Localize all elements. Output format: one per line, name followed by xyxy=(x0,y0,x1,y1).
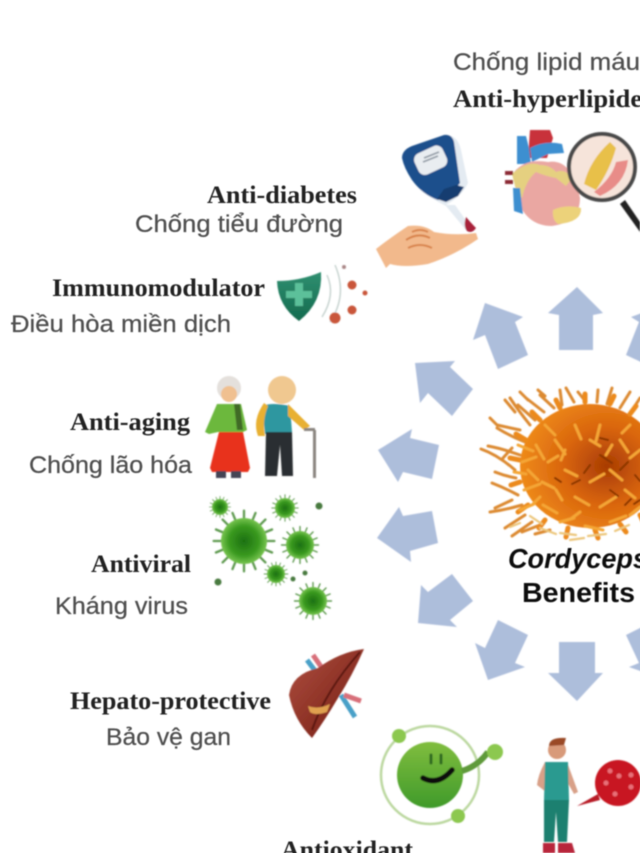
label: immunomodulator: Immunomodulator xyxy=(52,275,265,302)
icon: green viruses xyxy=(209,495,331,619)
icon: shield with germs xyxy=(277,265,368,324)
label: hepato-protective: Hepato-protective xyxy=(70,688,271,715)
label: hepato-protective xyxy=(70,688,271,751)
label: immunomodulator: Điều hòa miền dịch xyxy=(11,311,231,338)
heading: Cordyceps Benefits xyxy=(508,543,640,608)
heading: Cordyceps Benefits: Benefits xyxy=(522,577,635,608)
label: antiviral: Kháng virus xyxy=(55,593,188,620)
label: anti-hyperlipidemia: Chống lipid máu xyxy=(453,49,640,76)
circular ring of benefit arrows xyxy=(377,287,640,701)
icon: cordyceps mushroom cluster xyxy=(481,388,640,540)
label: anti-hyperlipidemia xyxy=(453,49,640,113)
label: anti-aging: Anti-aging xyxy=(70,409,191,436)
icon: heart with magnifier xyxy=(505,130,640,232)
label: antiviral xyxy=(55,551,191,620)
label: antiviral: Antiviral xyxy=(91,551,191,578)
icon: liver xyxy=(289,649,364,738)
label: immunomodulator xyxy=(11,275,265,338)
icon: glucose meter and finger xyxy=(376,135,478,268)
label: anti-diabetes: Anti-diabetes xyxy=(207,182,357,209)
icon: person with red cell xyxy=(537,738,640,853)
label: anti-aging: Chống lão hóa xyxy=(29,452,193,479)
icon: smiling antioxidant xyxy=(381,726,503,824)
label: anti-aging xyxy=(29,409,193,479)
icon: elderly couple xyxy=(205,376,316,478)
label: hepato-protective: Bảo vệ gan xyxy=(106,724,231,751)
label: anti-diabetes xyxy=(135,182,357,238)
label: anti-diabetes: Chống tiểu đường xyxy=(135,211,343,238)
